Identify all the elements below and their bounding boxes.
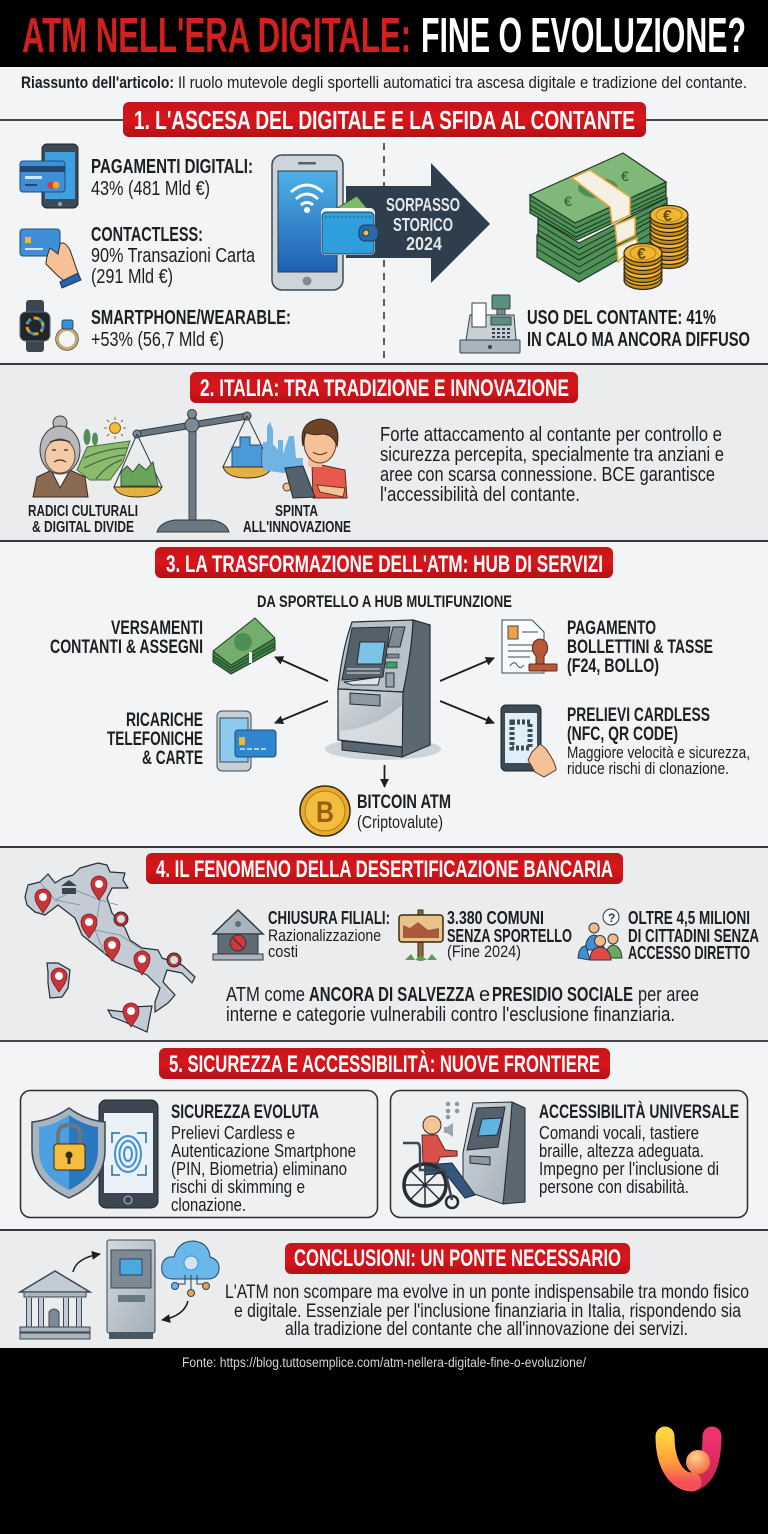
label: bitcoin ATM: (Criptovalute) bbox=[357, 812, 443, 832]
text: radici culturali bbox=[28, 503, 138, 536]
icon: wheelchair user at ATM bbox=[403, 1102, 525, 1208]
text: pagamenti digitali: 43% (481 Mld €) bbox=[91, 178, 210, 200]
text: smartphone wearable: +53% (56,7 Mld €) bbox=[91, 329, 224, 351]
text: sicurezza evoluta: rischi di skimming e bbox=[171, 1177, 305, 1197]
text: sicurezza evoluta: (PIN, Biometria) eliminano bbox=[171, 1159, 347, 1179]
summary line: Riassunto dell'articolo: bbox=[21, 74, 174, 92]
label: prelievi cardless: (NFC, QR CODE) bbox=[567, 723, 678, 745]
logo bbox=[665, 1436, 712, 1482]
divider: dashed line bbox=[383, 143, 385, 360]
label: ricariche bbox=[107, 709, 203, 769]
icon: phone with QR code bbox=[501, 705, 556, 777]
text: uso del contante bbox=[527, 307, 750, 351]
text: sicurezza evoluta bbox=[171, 1101, 356, 1215]
text block: ATM as social safeguard bbox=[226, 984, 699, 1026]
panel: conclusions bbox=[20, 1240, 749, 1340]
heading: conclusions: CONCLUSIONI: UN PONTE NECESSARIO bbox=[294, 1245, 621, 1272]
label: versamenti: VERSAMENTI bbox=[111, 617, 203, 639]
panel: section 3 ATM hub bbox=[50, 547, 750, 836]
icon: cash stack and coins: € bbox=[663, 208, 672, 225]
text: chiusura filiali: CHIUSURA FILIALI: bbox=[268, 908, 390, 928]
arrows: ATM services bbox=[275, 657, 494, 787]
label: pagamento: PAGAMENTO bbox=[567, 617, 656, 639]
text: spinta all'innovazione bbox=[243, 503, 351, 536]
icon: contactless card and hand bbox=[20, 229, 81, 288]
icon: grandmother bbox=[33, 416, 88, 497]
icon: cash stack and coins: € bbox=[637, 246, 646, 263]
text: sicurezza evoluta: SICUREZZA EVOLUTA bbox=[171, 1101, 319, 1123]
icon: balance scale bbox=[114, 410, 272, 532]
icon: phone with fingerprint bbox=[99, 1100, 158, 1208]
heading: conclusions bbox=[285, 1243, 630, 1274]
icon: group of citizens: ? bbox=[608, 911, 615, 925]
text: sicurezza evoluta: clonazione. bbox=[171, 1195, 246, 1215]
icon: shield with padlock bbox=[32, 1108, 105, 1198]
icon: bitcoin coin bbox=[300, 786, 350, 836]
text block: ATM as social safeguard: ATM come bbox=[226, 984, 305, 1006]
text: pagamenti digitali: PAGAMENTI DIGITALI: bbox=[91, 156, 253, 178]
text: contactless bbox=[91, 224, 256, 288]
label: pagamento: (F24, BOLLO) bbox=[567, 655, 659, 677]
icon: countryside bbox=[77, 417, 130, 480]
text block: ATM as social safeguard: e bbox=[479, 984, 490, 1006]
text: accessibilita universale: Comandi vocali, tastiere bbox=[539, 1123, 699, 1143]
icon: city skyline and boy with tablet bbox=[263, 419, 347, 498]
label: pagamento: BOLLETTINI & TASSE bbox=[567, 636, 713, 658]
arrow: sorpasso storico 2024: 2024 bbox=[406, 233, 443, 254]
text block: Italian cash attachment: l'accessibilità del contante. bbox=[380, 484, 580, 506]
icon: phone with card bbox=[217, 711, 276, 771]
text: comuni senza sportello: 3.380 COMUNI bbox=[447, 908, 544, 928]
heading: section 5 bbox=[159, 1048, 610, 1079]
label: versamenti bbox=[50, 617, 203, 658]
label: ricariche: TELEFONICHE bbox=[107, 728, 203, 750]
title: ATM NELL'ERA DIGITALE: bbox=[22, 9, 411, 63]
text: sicurezza evoluta: Prelievi Cardless e bbox=[171, 1123, 295, 1143]
icon: bank to ATM to cloud bbox=[20, 1240, 219, 1339]
text: contactless: CONTACTLESS: bbox=[91, 224, 203, 246]
text: pagamenti digitali bbox=[91, 156, 253, 200]
text: chiusura filiali: Razionalizzazione bbox=[268, 926, 381, 945]
label: versamenti: CONTANTI & ASSEGNI bbox=[50, 636, 203, 658]
panel: section 2 Italy bbox=[28, 372, 724, 536]
heading: section 1 bbox=[123, 102, 646, 137]
text: contactless: 90% Transazioni Carta bbox=[91, 245, 256, 267]
text: comuni senza sportello: SENZA SPORTELLO bbox=[447, 926, 572, 946]
arrow: sorpasso storico 2024: SORPASSO bbox=[386, 194, 460, 215]
arrow: sorpasso storico 2024: STORICO bbox=[393, 214, 453, 235]
text: radici culturali: & DIGITAL DIVIDE bbox=[32, 519, 134, 536]
text: comuni senza sportello: (Fine 2024) bbox=[447, 942, 521, 961]
label: prelievi cardless: riduce rischi di clonazione. bbox=[567, 760, 729, 778]
subheading: hub: DA SPORTELLO A HUB MULTIFUNZIONE bbox=[257, 592, 512, 611]
label: pagamento bbox=[567, 617, 713, 677]
label: bitcoin ATM bbox=[357, 791, 451, 832]
icon: phone with wallet bbox=[272, 155, 378, 290]
text block: ATM as social safeguard: per aree bbox=[638, 984, 699, 1006]
text: chiusura filiali bbox=[268, 908, 390, 961]
text block: conclusion bbox=[225, 1282, 749, 1340]
text block: ATM as social safeguard: ANCORA DI SALVEZZA bbox=[309, 984, 475, 1006]
heading: section 3 bbox=[155, 547, 613, 578]
label: prelievi cardless bbox=[567, 704, 750, 778]
icon: smartwatch and ring bbox=[20, 300, 78, 352]
text: chiusura filiali: costi bbox=[268, 942, 298, 961]
text block: ATM as social safeguard: PRESIDIO SOCIALE bbox=[492, 984, 633, 1006]
text: cittadini senza accesso bbox=[628, 908, 759, 963]
title bbox=[0, 0, 768, 67]
text: accessibilita universale: persone con disabilità. bbox=[539, 1177, 689, 1197]
icon: phone and card bbox=[20, 144, 78, 208]
icon: group of citizens bbox=[578, 909, 622, 960]
panel: section 1 digital vs cash bbox=[20, 102, 750, 360]
text: smartphone wearable bbox=[91, 307, 291, 351]
label: bitcoin ATM: BITCOIN ATM bbox=[357, 791, 451, 813]
panel: section 4 bank desertification bbox=[25, 853, 759, 1032]
icon: banknotes bbox=[213, 618, 275, 674]
icon: cash register bbox=[460, 295, 520, 353]
icon: closed bank bbox=[213, 910, 263, 960]
label: prelievi cardless: PRELIEVI CARDLESS bbox=[567, 704, 710, 726]
icon: document and stamp bbox=[502, 620, 557, 673]
icon: central ATM bbox=[325, 620, 441, 760]
text block: ATM as social safeguard: interne e categorie vulnerabili contro l'esclusione finanziaria. bbox=[226, 1004, 675, 1026]
label: ricariche: RICARICHE bbox=[126, 709, 203, 731]
text: spinta all'innovazione: ALL'INNOVAZIONE bbox=[243, 519, 351, 536]
text block: conclusion: alla tradizione del contante che all'innovazione dei servizi. bbox=[285, 1319, 688, 1340]
icon: cash stack and coins: € bbox=[564, 193, 572, 209]
text: radici culturali: RADICI CULTURALI bbox=[28, 503, 138, 520]
text: comuni senza sportello bbox=[447, 908, 572, 961]
text: smartphone wearable: SMARTPHONE/WEARABLE: bbox=[91, 307, 291, 329]
text: accessibilita universale: braille, altezza adeguata. bbox=[539, 1141, 704, 1161]
text: sicurezza evoluta: Autenticazione Smartphone bbox=[171, 1141, 356, 1161]
card: evolved security bbox=[20, 1090, 378, 1218]
icon: sign post bbox=[399, 910, 443, 960]
text block: Italian cash attachment bbox=[380, 424, 724, 506]
text: spinta all'innovazione: SPINTA bbox=[275, 503, 318, 520]
panel: section 5 security and accessibility bbox=[20, 1048, 748, 1218]
card: universal accessibility bbox=[390, 1090, 748, 1218]
icon: cash stack and coins bbox=[530, 153, 688, 290]
icon: bitcoin coin: B bbox=[316, 796, 334, 829]
map: Italy with pins bbox=[25, 863, 195, 1032]
heading: section 4 bbox=[146, 853, 623, 884]
label: ricariche: & CARTE bbox=[142, 747, 203, 769]
icon: cash stack and coins: € bbox=[621, 168, 629, 184]
arrow: sorpasso storico 2024 bbox=[346, 163, 490, 283]
heading: section 2: 2. ITALIA: TRA TRADIZIONE E INNOVAZIONE bbox=[200, 375, 569, 402]
source line: Fonte: https://blog.tuttosemplice.com/atm-nellera-digitale-fine-o-evoluzione/ bbox=[182, 1355, 586, 1370]
text: accessibilita universale: Impegno per l'inclusione di bbox=[539, 1159, 719, 1179]
text: contactless: (291 Mld €) bbox=[91, 266, 173, 288]
heading: section 2 bbox=[190, 372, 578, 403]
text: accessibilita universale bbox=[539, 1100, 739, 1197]
